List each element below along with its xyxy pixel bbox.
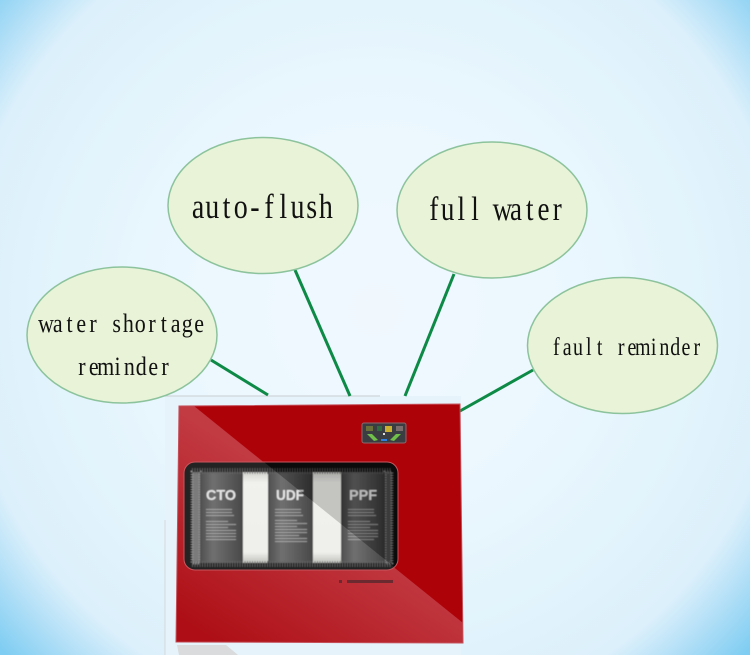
- panel gloss: [176, 406, 463, 643]
- cartridge: PPF: PPF: [349, 487, 377, 504]
- white cartridge 1: [243, 472, 268, 563]
- bubble: auto-flush: auto-flush: [192, 187, 333, 226]
- bubble: water shortage reminder: reminder: [78, 352, 169, 382]
- connector lines: [211, 270, 533, 411]
- bubble: full water: full water: [429, 190, 562, 228]
- cartridge: CTO: CTO: [206, 487, 236, 504]
- red front panel: [176, 404, 463, 643]
- filter window: [184, 462, 398, 570]
- white cartridge 2: [313, 472, 341, 563]
- bubble: fault reminder: fault reminder: [553, 333, 701, 361]
- edge strip right: [385, 472, 392, 563]
- purifier backing: [165, 396, 461, 655]
- bubble: fault reminder: [528, 278, 718, 414]
- window gloss: [184, 462, 398, 570]
- bubble: water shortage reminder: [27, 267, 217, 403]
- cartridge: UDF: UDF: [276, 487, 304, 504]
- model label: [339, 580, 393, 583]
- water purifier: [176, 404, 463, 643]
- window border: [184, 462, 398, 570]
- bubble: water shortage reminder: water shortage: [38, 309, 204, 339]
- bubble: auto-flush: [168, 138, 358, 274]
- cartridge: UDF: [268, 472, 313, 563]
- bubble: full water: [397, 142, 587, 278]
- cartridge: CTO: [200, 472, 243, 563]
- control display: [362, 423, 406, 443]
- edge strip left: [192, 472, 200, 563]
- cartridge: PPF: [341, 472, 385, 563]
